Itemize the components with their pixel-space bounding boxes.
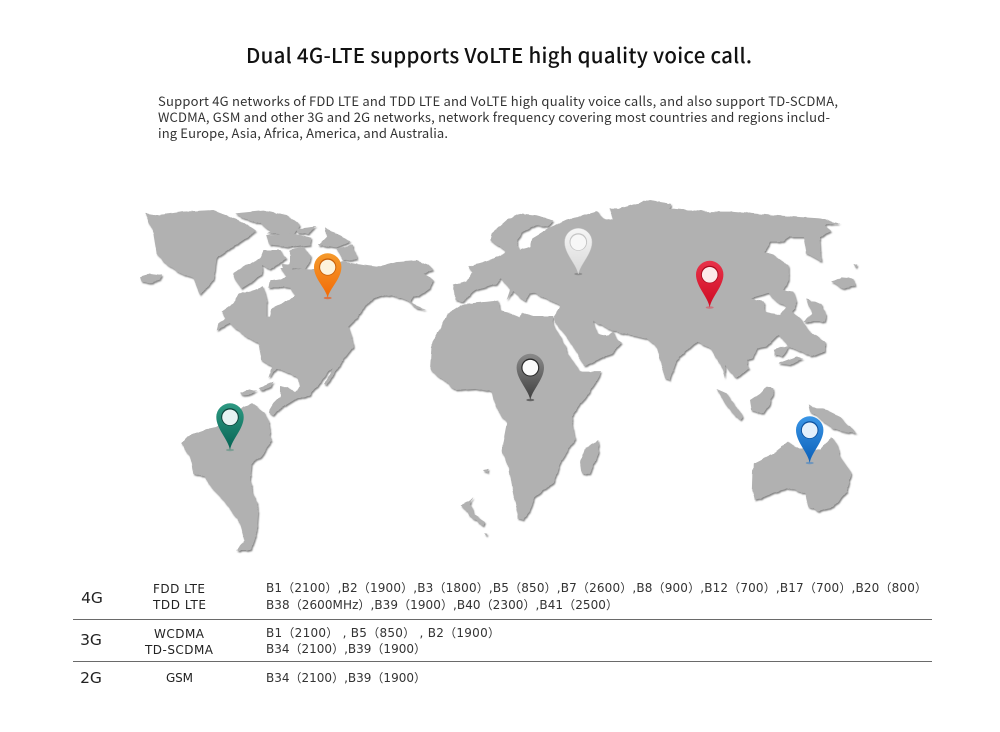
row: 3G: B1（2100） , B5（850） , B2（1900） — [266, 626, 500, 640]
row: 2G: 2G — [80, 669, 102, 687]
pin: red, Asia — [696, 261, 723, 309]
intro paragraph: Support 4G networks of FDD LTE and TDD LTE and VoLTE high quality voice calls, and also support TD-SCDMA, — [158, 91, 838, 110]
row: 3G — [80, 626, 500, 657]
row: 2G: B34（2100）,B39（1900） — [266, 671, 426, 685]
intro paragraph: WCDMA, GSM and other 3G and 2G networks, network frequency covering most countries and regions includ- — [158, 107, 830, 126]
row: 4G: FDD LTE — [153, 582, 205, 596]
map: Africa, Eurasia and Australia — [430, 200, 857, 520]
pin: blue, Australia — [796, 416, 823, 464]
title: Dual 4G-LTE supports VoLTE high quality voice call. — [246, 39, 752, 69]
row: 3G: TD-SCDMA — [144, 643, 214, 657]
pin: dark grey, Africa — [517, 354, 544, 401]
table: network bands — [80, 581, 927, 687]
world map — [140, 200, 857, 550]
row: 3G: B34（2100）,B39（1900） — [266, 642, 426, 656]
intro paragraph — [158, 91, 838, 142]
row: 2G: GSM — [166, 671, 193, 685]
row: 4G: 4G — [81, 589, 103, 607]
row: 4G: TDD LTE — [152, 598, 206, 612]
pin: orange, North America — [314, 253, 341, 299]
pin: green, South America — [216, 403, 244, 451]
row: 4G: B38（2600MHz）,B39（1900）,B40（2300）,B41（2500） — [266, 598, 618, 612]
map: Americas and Greenland — [140, 210, 489, 550]
row: 4G — [81, 581, 927, 612]
pin: white, Europe — [565, 228, 592, 275]
row: 3G: WCDMA — [154, 627, 205, 641]
row: 4G: B1（2100）,B2（1900）,B3（1800）,B5（850）,B7（2600）,B8（900）,B12（700）,B17（700）,B20（800） — [266, 581, 927, 595]
row: 3G: 3G — [80, 631, 102, 649]
intro paragraph: ing Europe, Asia, Africa, America, and Australia. — [158, 123, 448, 142]
row: 2G — [80, 669, 426, 687]
